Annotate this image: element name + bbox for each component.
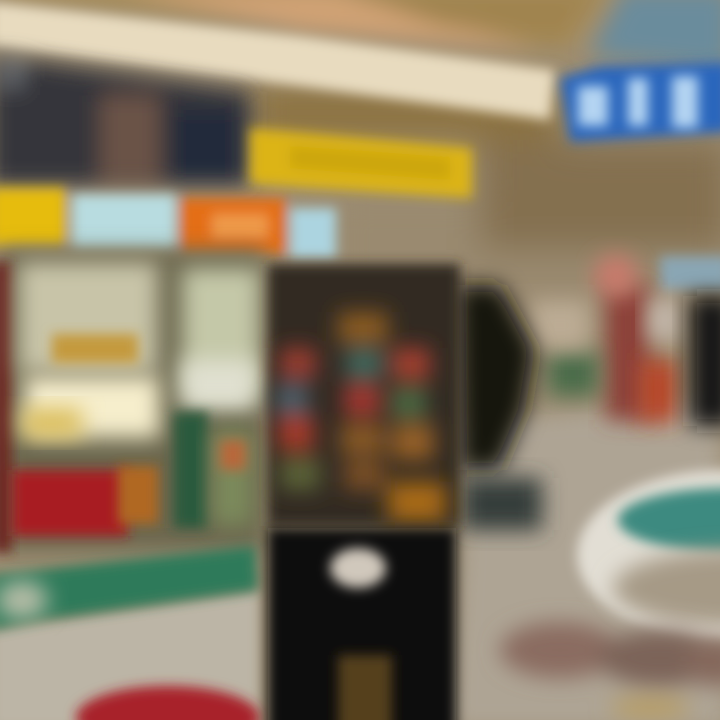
sign canopy — [590, 0, 720, 70]
muted panel — [212, 430, 252, 526]
floor, left — [0, 546, 260, 720]
ceiling band — [0, 2, 555, 120]
body — [458, 285, 535, 470]
machine base — [268, 528, 456, 720]
orange accent — [220, 440, 246, 470]
floor, right — [450, 400, 720, 720]
back wall, right side — [250, 85, 720, 370]
grey floor — [0, 590, 260, 720]
machine head — [268, 264, 460, 526]
pebbles, lower right — [500, 622, 720, 718]
blue shop panel — [660, 256, 720, 290]
red skirt — [640, 360, 676, 422]
shop base tone — [0, 250, 265, 550]
shop counter, left — [0, 250, 265, 552]
shopper head — [594, 254, 638, 298]
dark shopfront header, left — [0, 55, 250, 185]
ceiling, top — [0, 0, 620, 50]
outer rim — [577, 470, 720, 640]
yellow sign — [250, 128, 472, 198]
second shop panel — [182, 268, 260, 398]
white top — [648, 298, 680, 342]
coin plate — [330, 548, 386, 588]
shopper in red — [606, 285, 650, 420]
orange lower display — [118, 466, 158, 524]
green planter — [548, 350, 598, 396]
sign lettering blobs — [578, 76, 698, 128]
green lower panel — [174, 412, 208, 528]
red lower display — [12, 470, 128, 536]
inner basin — [618, 488, 720, 552]
ledge below water — [613, 550, 720, 626]
sign panel — [560, 62, 720, 142]
fountain — [577, 470, 720, 640]
pale lit panel — [182, 360, 256, 410]
shop window — [18, 262, 158, 372]
left edge post — [0, 262, 12, 552]
red floor mat — [76, 686, 260, 720]
yellow counter edge — [22, 408, 82, 438]
blue sign, top right — [560, 0, 720, 142]
shoppers, right — [530, 254, 720, 426]
pale display — [530, 300, 590, 350]
amber display — [52, 334, 138, 364]
person in black beside machine — [458, 285, 542, 530]
pale spot on mat — [0, 580, 48, 620]
shopper in black — [690, 296, 720, 426]
green floor mat — [0, 546, 258, 630]
bag — [462, 478, 542, 530]
product slots — [276, 312, 446, 522]
vending machine — [268, 264, 460, 720]
brown door — [338, 655, 392, 720]
coloured shop sign strip — [0, 188, 336, 258]
bright lit counter — [24, 376, 160, 438]
